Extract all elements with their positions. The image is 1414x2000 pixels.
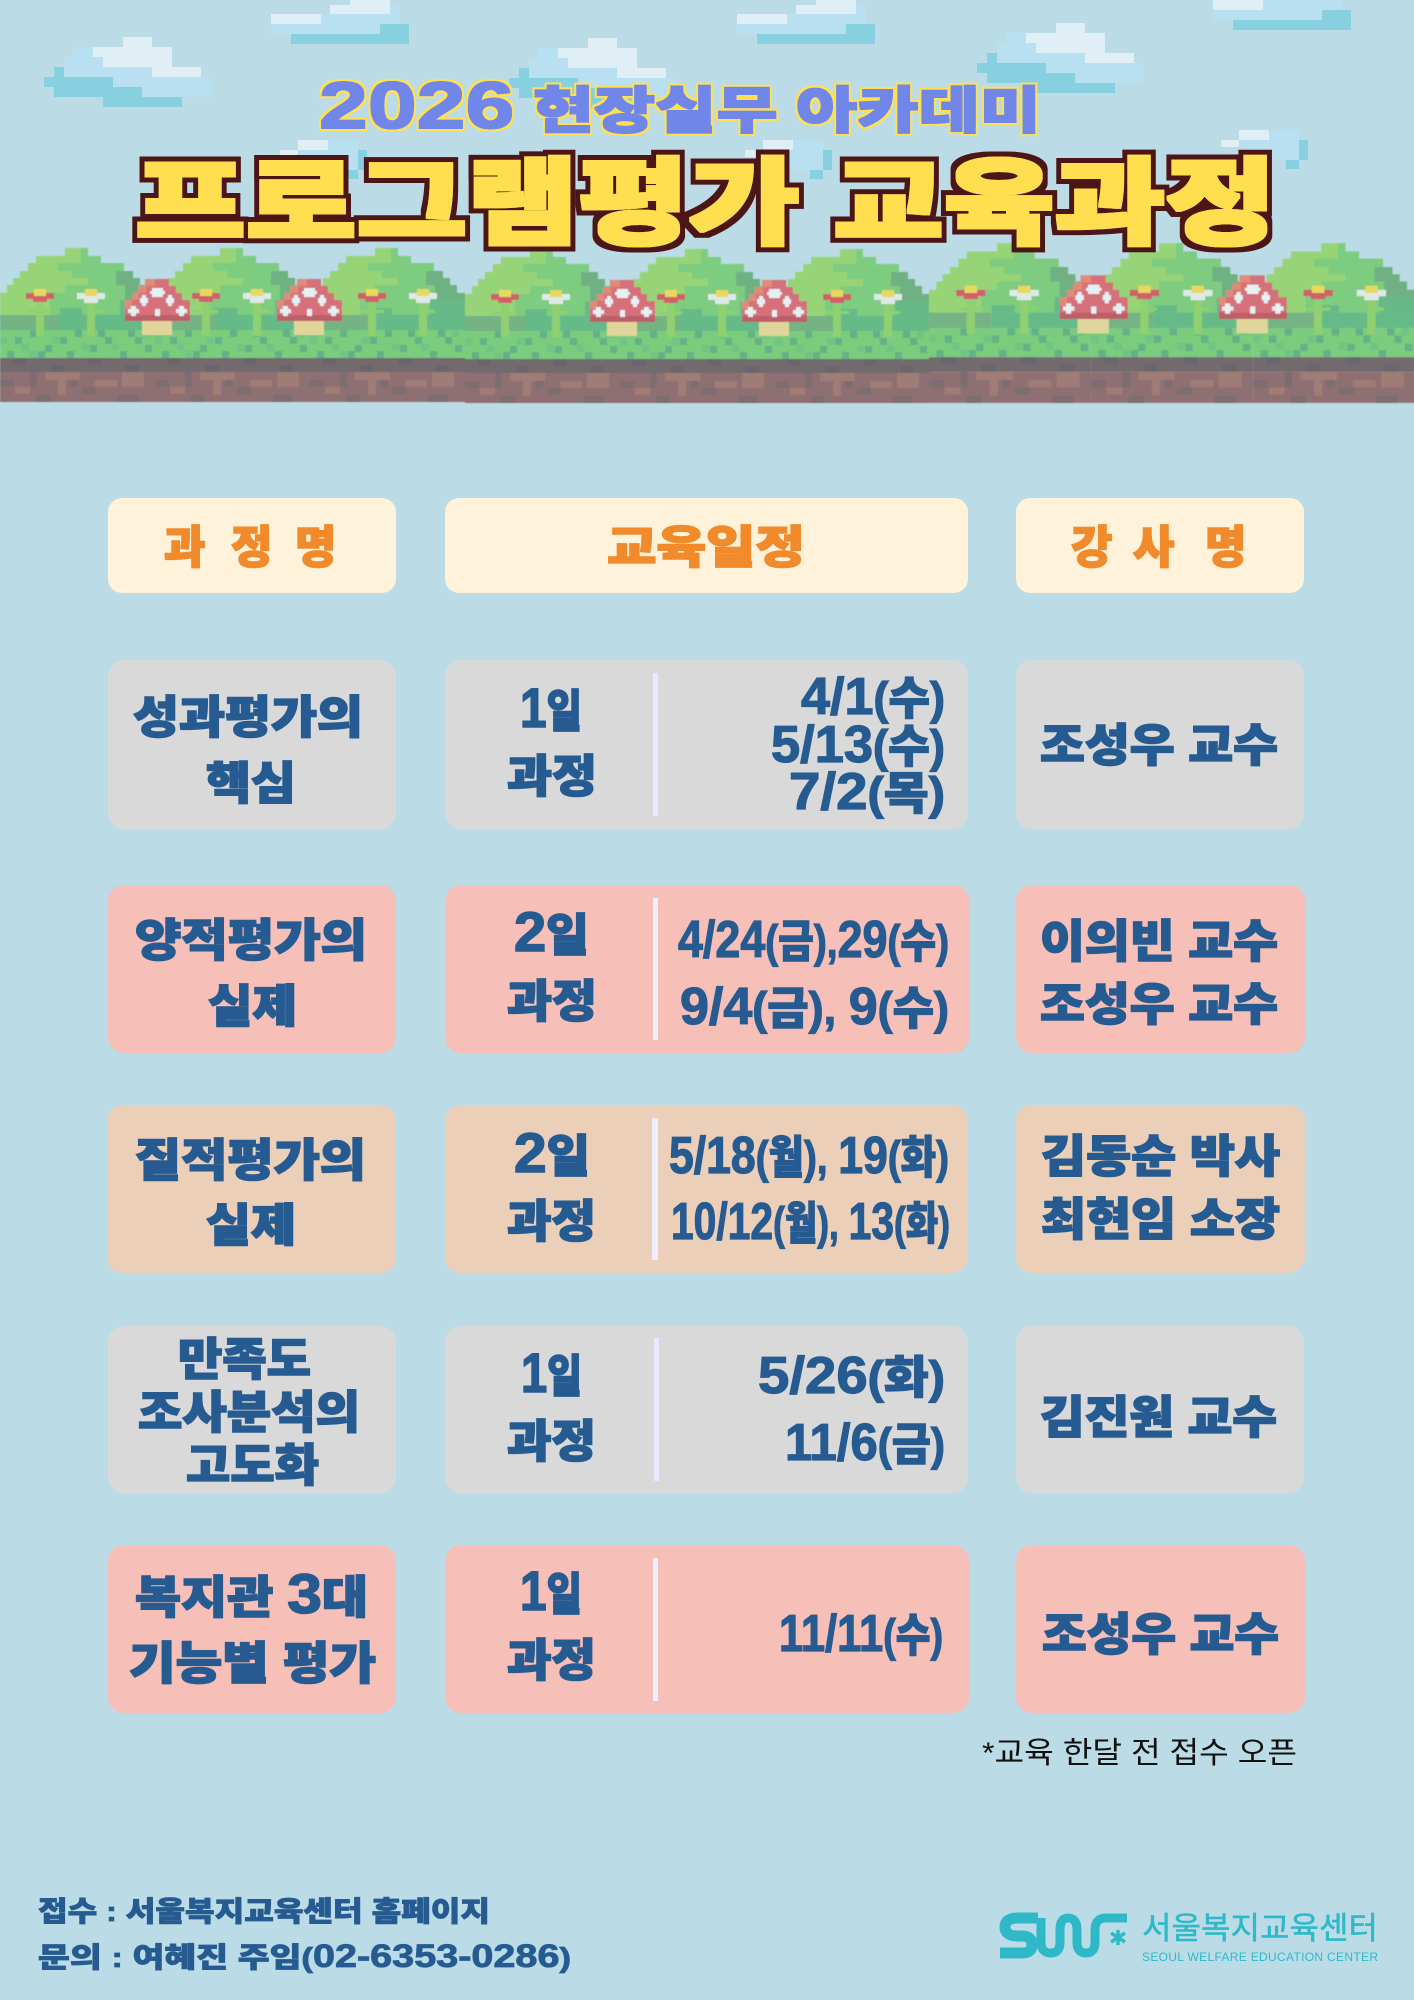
course name — [108, 1545, 396, 1713]
course name — [107, 1105, 396, 1273]
instructor: 조성우 교수 — [1040, 720, 1278, 771]
instructor — [1016, 1545, 1305, 1713]
course name: 실제 — [206, 1200, 296, 1251]
instructor — [1016, 1105, 1305, 1273]
schedule: 과정 — [507, 1635, 596, 1686]
schedule — [445, 1326, 968, 1493]
schedule: 5/13(수) — [771, 716, 945, 774]
instructor: 김동순 박사 — [1041, 1131, 1280, 1182]
instructor — [1016, 1326, 1304, 1493]
instructor: 최현임 소장 — [1041, 1194, 1280, 1245]
course name: 복지관 3대 — [135, 1562, 368, 1625]
course name: 고도화 — [186, 1440, 319, 1491]
schedule: 1일 — [521, 1341, 582, 1404]
schedule: 2일 — [514, 900, 589, 963]
course name: 조사분석의 — [138, 1387, 360, 1438]
schedule: 11/6(금) — [785, 1414, 945, 1472]
header: instructor — [1016, 498, 1304, 593]
table header — [108, 498, 1304, 593]
course name: 실제 — [208, 981, 297, 1032]
instructor: 이의빈 교수 — [1040, 916, 1278, 967]
course name — [108, 885, 396, 1053]
header: schedule: 교육일정 — [607, 522, 805, 573]
schedule: 과정 — [507, 976, 597, 1027]
schedule: 1일 — [520, 676, 582, 739]
schedule — [445, 885, 969, 1053]
schedule: 11/11(수) — [779, 1605, 943, 1663]
instructor: 조성우 교수 — [1040, 979, 1278, 1030]
schedule: 과정 — [507, 1416, 596, 1467]
schedule: 과정 — [507, 1196, 596, 1247]
schedule: 5/18(월), 19(화) — [669, 1127, 949, 1185]
instructor — [1016, 885, 1305, 1053]
course name: 핵심 — [206, 758, 296, 809]
row 1: 성과평가의 핵심 — [108, 660, 1304, 829]
header: course name — [108, 498, 396, 593]
schedule: 과정 — [507, 751, 597, 802]
row 4: 만족도 조사분석의 고도화 — [108, 1326, 1304, 1493]
schedule: 10/12(월), 13(화) — [671, 1193, 950, 1251]
row 2: 양적평가의 실제 — [108, 885, 1305, 1053]
schedule: 7/2(목) — [789, 763, 945, 821]
course name: 질적평가의 — [135, 1135, 366, 1186]
schedule: 9/4(금), 9(수) — [680, 978, 949, 1036]
footer contact line: 문의 : 여혜진 주임( 02-6353-0286 ) — [38, 1938, 571, 1974]
header: instructor: 강 사 명 — [1071, 522, 1246, 573]
logo: Seoul Welfare Education Center — [1000, 1911, 1378, 1964]
schedule — [445, 1545, 969, 1713]
course name: 기능별 평가 — [129, 1638, 376, 1689]
schedule: 4/24(금),29(수) — [678, 911, 949, 969]
row 5: 복지관 3대 기능별 평가 — [108, 1545, 1305, 1713]
schedule — [445, 660, 968, 829]
course name: 양적평가의 — [135, 915, 367, 966]
schedule: 2일 — [514, 1121, 590, 1184]
instructor — [1016, 660, 1304, 829]
schedule: 5/26(화) — [758, 1347, 945, 1405]
course name: 성과평가의 — [133, 692, 363, 743]
logo mark — [1000, 1918, 1127, 1953]
course name — [108, 660, 396, 829]
pixel landscape with hills, flowers, mushrooms and soil — [0, 243, 1414, 403]
course name — [108, 1326, 396, 1493]
subtitle: 2026 현장실무 아카데미 — [319, 68, 1041, 142]
schedule — [445, 1105, 968, 1273]
footer registration line: 접수 : 서울복지교육센터 홈페이지 — [38, 1896, 490, 1927]
schedule: 4/1(수) — [801, 668, 945, 726]
course name: 만족도 — [178, 1334, 311, 1385]
instructor: 김진원 교수 — [1040, 1392, 1277, 1443]
logo English name: SEOUL WELFARE EDUCATION CENTER — [1142, 1950, 1378, 1964]
pixel clouds — [44, 0, 1351, 179]
schedule: 1일 — [520, 1559, 582, 1622]
header: course name: 과 정 명 — [164, 522, 336, 573]
row 3: 질적평가의 실제 — [107, 1105, 1305, 1273]
logo Korean name: 서울복지교육센터 — [1142, 1911, 1378, 1946]
header: schedule — [445, 498, 968, 593]
instructor: 조성우 교수 — [1042, 1609, 1279, 1660]
main title: 프로그램평가 교육과정 — [135, 151, 1276, 256]
registration note: *교육 한달 전 접수 오픈 — [982, 1737, 1297, 1770]
